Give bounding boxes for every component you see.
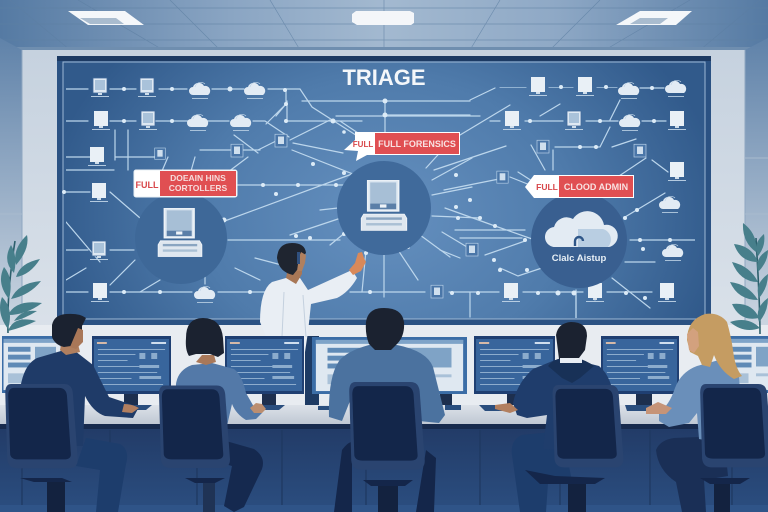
label: full forensics: FULL [353, 140, 373, 149]
chair 2 [159, 385, 230, 512]
label: full forensics [344, 132, 460, 161]
panel: network wall display [57, 56, 711, 325]
monitor 1 [2, 336, 62, 393]
monitor 4 [312, 337, 467, 405]
chair 1 [5, 384, 78, 512]
person: analyst 4 [495, 322, 613, 512]
light: centre panel [352, 11, 414, 25]
monitor 3 [225, 336, 304, 405]
monitor 2 [92, 336, 171, 405]
hub: forensics [337, 161, 431, 255]
plant: left [0, 235, 42, 333]
keyboards [118, 405, 655, 411]
person: analyst 5 [646, 314, 742, 512]
network nodes [62, 85, 672, 300]
network lines [66, 87, 695, 318]
ceiling [0, 0, 768, 52]
monitor 6 [601, 336, 679, 405]
chair 5 [700, 384, 768, 512]
person: analyst 2 [174, 318, 266, 512]
light: right panel [616, 11, 692, 25]
person: analyst 1 [21, 314, 139, 512]
monitor 7 [723, 336, 768, 393]
label: domain controllers [134, 170, 237, 197]
label: domain controllers: DOEAIN HINS [170, 173, 226, 183]
label: domain controllers: CORTOLLERS [169, 183, 228, 193]
label: cloud admin: CLOOD ADMIN [564, 182, 628, 192]
person: standing analyst [260, 243, 366, 406]
label: domain controllers: FULL [136, 180, 159, 190]
label: cloud admin [525, 175, 634, 198]
label: cloud admin: FULL [536, 182, 558, 192]
icons: network devices [88, 77, 686, 303]
monitor 5 [474, 336, 555, 405]
hub: domain controllers [135, 192, 227, 284]
light: left panel [68, 11, 144, 25]
desk: workstation counter [0, 405, 768, 512]
person: analyst 3 [329, 308, 445, 512]
chair 3 [349, 382, 425, 512]
chair 4 [525, 385, 623, 512]
label: full forensics: FULL FORENSICS [378, 139, 456, 149]
back wall [0, 38, 768, 407]
hub: cloud: Clalc Aistup [552, 253, 606, 264]
plant: right [730, 223, 768, 334]
hub: cloud [531, 192, 627, 288]
title: TRIAGE [342, 65, 426, 90]
